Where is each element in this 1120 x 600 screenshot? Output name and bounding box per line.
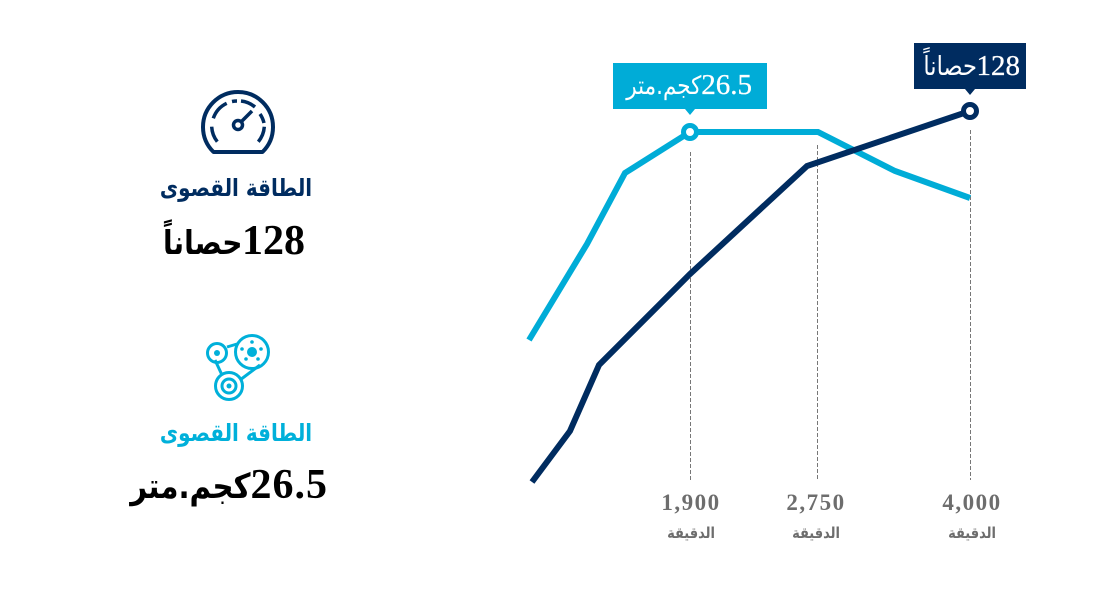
callout text: power bbox=[923, 47, 1020, 82]
value: max power bbox=[163, 218, 305, 264]
x label: 4,000: الدقيقة bbox=[948, 524, 996, 542]
x label: 2,750 bbox=[786, 490, 846, 542]
x label: 4,000: 4,000 bbox=[942, 490, 1002, 515]
x label: 2,750: 2,750 bbox=[786, 490, 846, 515]
callout text: torque: 26.5 bbox=[701, 69, 752, 101]
navy callout box bbox=[914, 43, 1026, 95]
value: max torque bbox=[129, 462, 328, 508]
callout text: torque: كجم.متر bbox=[626, 71, 701, 100]
heading: max torque: الطاقة القصوى bbox=[160, 419, 312, 447]
value: max torque: كجم.متر bbox=[130, 467, 250, 507]
callout text: power: 128 bbox=[976, 50, 1020, 82]
cyan callout box bbox=[613, 63, 767, 115]
navy marker bbox=[964, 104, 976, 118]
x label: 1,900: 1,900 bbox=[661, 490, 721, 515]
icon: speedometer bbox=[201, 90, 275, 154]
heading: max power: الطاقة القصوى bbox=[160, 174, 312, 202]
guide lines bbox=[690, 130, 970, 480]
cyan marker bbox=[684, 126, 696, 138]
value: max torque: 26.5 bbox=[250, 462, 328, 508]
x label: 4,000 bbox=[942, 490, 1002, 542]
value: max power: حصاناً bbox=[163, 223, 242, 262]
value: max power: 128 bbox=[242, 218, 305, 264]
callout text: power: حصاناً bbox=[923, 51, 976, 82]
navy power line bbox=[532, 111, 970, 482]
icon: belt pulleys bbox=[206, 334, 270, 401]
x label: 1,900 bbox=[661, 490, 721, 542]
x label: 1,900: الدقيقة bbox=[667, 524, 715, 542]
callout text: torque bbox=[625, 69, 752, 101]
cyan torque line bbox=[529, 132, 970, 340]
x label: 2,750: الدقيقة bbox=[792, 524, 840, 542]
